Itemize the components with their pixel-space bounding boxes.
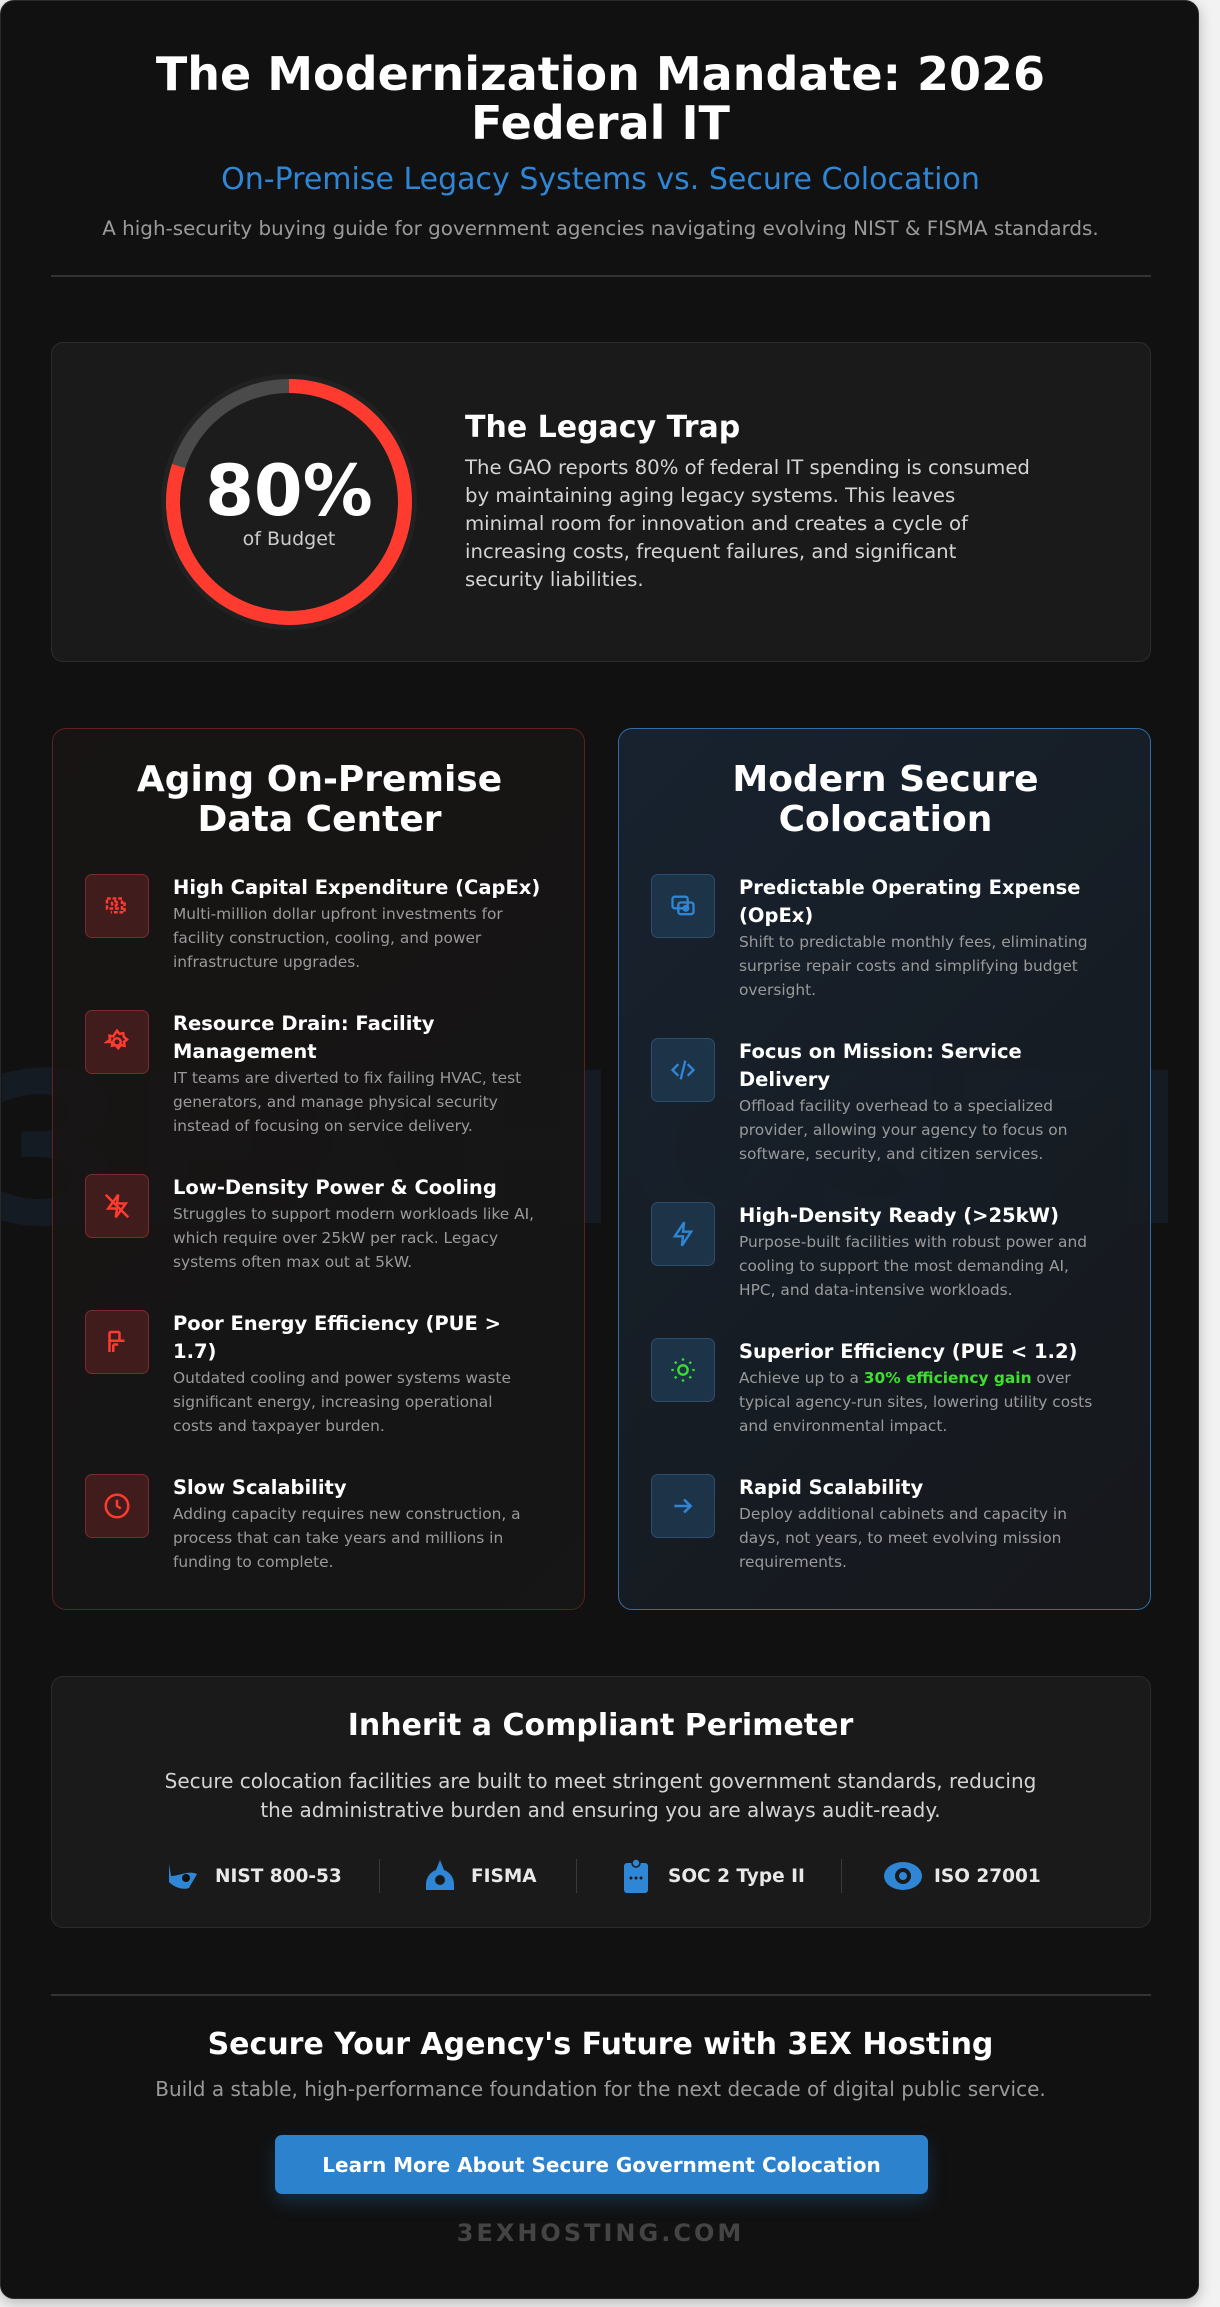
footer: brand: 3EXHOSTING.COM <box>457 2219 744 2247</box>
item: low density <box>85 1174 534 1271</box>
button: learn more: Learn More About Secure Government Colocation <box>322 2152 881 2176</box>
item: poor efficiency: Outdated cooling and power systems waste significant energy, increasing operational costs and taxpayer burden. <box>173 1369 511 1435</box>
badge: NIST <box>169 1864 342 1889</box>
badge: FISMA: FISMA <box>471 1866 537 1886</box>
item: opex <box>651 874 1088 999</box>
item: capex: High Capital Expenditure (CapEx) <box>173 876 540 899</box>
item: poor efficiency <box>85 1310 511 1435</box>
item: low density: Low-Density Power & Cooling <box>173 1176 497 1199</box>
badge: SOC 2 <box>624 1860 805 1893</box>
badge: ISO <box>884 1862 1041 1890</box>
panel: modern colocation <box>618 728 1151 1610</box>
item: focus on mission: Focus on Mission: Service Delivery <box>739 1040 1022 1091</box>
item: resource drain: IT teams are diverted to fix failing HVAC, test generators, and manage physical security instead of focusing on service delivery. <box>173 1069 521 1135</box>
badge: ISO: ISO 27001 <box>934 1866 1041 1886</box>
item: superior efficiency <box>651 1338 1092 1435</box>
item: slow scalability: Adding capacity requires new construction, a process that can take years and millions in funding to complete. <box>173 1505 521 1571</box>
heading: modern secure colocation: Modern Secure <box>732 759 1039 800</box>
donut chart: 80% of budget <box>166 379 412 625</box>
item: superior efficiency: Achieve up to a 30% efficiency gain over typical agency-run sites, lowering utility costs and environmental impact. <box>739 1369 1092 1435</box>
text: compliance body <box>165 1769 1036 1822</box>
heading: aging on-premise: Data Center <box>197 799 442 840</box>
heading: aging on-premise: Aging On-Premise <box>137 759 502 800</box>
item: low density: Struggles to support modern workloads like AI, which require over 25kW per rack. Legacy systems often max out at 5kW. <box>173 1205 534 1271</box>
item: capex <box>85 874 540 971</box>
item: superior efficiency: Superior Efficiency (PUE < 1.2) <box>739 1340 1077 1363</box>
item: slow scalability <box>85 1474 521 1571</box>
heading: CTA: Secure Your Agency's Future with 3EX Hosting <box>208 2027 993 2062</box>
heading: the legacy trap: The Legacy Trap <box>465 410 740 445</box>
badge: FISMA <box>426 1860 537 1890</box>
heading: aging on-premise <box>137 759 502 840</box>
text: legacy trap body: The GAO reports 80% of federal IT spending is consumed by maintaining aging legacy systems. This leaves minimal room for innovation and creates a cycle of increasing costs, frequent failures, and significant security liabilities. <box>465 456 1030 591</box>
text: CTA subtext: Build a stable, high-performance foundation for the next decade of digital public service. <box>155 2077 1046 2101</box>
tagline: A high-security buying guide for government agencies navigating evolving NIST & FISMA standards. <box>102 217 1099 240</box>
subtitle: On-Premise Legacy Systems vs. Secure Colocation <box>221 162 980 197</box>
text: compliance body: the administrative burden and ensuring you are always audit-ready. <box>260 1798 941 1822</box>
item: poor efficiency: Poor Energy Efficiency (PUE > 1.7) <box>173 1312 501 1363</box>
panel: compliance <box>51 1676 1151 1928</box>
badge: NIST: NIST 800-53 <box>215 1866 342 1886</box>
badge: SOC 2: SOC 2 Type II <box>668 1866 805 1886</box>
item: high density <box>651 1202 1087 1299</box>
heading: modern secure colocation: Colocation <box>779 799 992 840</box>
item: rapid scalability <box>651 1474 1067 1571</box>
item: opex: Shift to predictable monthly fees, eliminating surprise repair costs and simplifying budget oversight. <box>739 933 1088 999</box>
item: high density: High-Density Ready (>25kW) <box>739 1204 1059 1227</box>
button: learn more <box>275 2135 928 2194</box>
text: compliance body: Secure colocation facilities are built to meet stringent government standards, reducing <box>165 1769 1036 1793</box>
item: rapid scalability: Rapid Scalability <box>739 1476 923 1499</box>
item: resource drain: Resource Drain: Facility Management <box>173 1012 434 1063</box>
heading: modern secure colocation <box>732 759 1039 840</box>
item: focus on mission <box>651 1038 1067 1163</box>
title <box>156 47 1045 150</box>
heading: inherit a compliant perimeter: Inherit a Compliant Perimeter <box>348 1708 853 1743</box>
item: focus on mission: Offload facility overhead to a specialized provider, allowing your agency to focus on software, security, and citizen services. <box>739 1097 1067 1163</box>
item: capex: Multi-million dollar upfront investments for facility construction, cooling, and power infrastructure upgrades. <box>173 905 503 971</box>
item: opex: Predictable Operating Expense (OpEx) <box>739 876 1080 927</box>
panel: aging on-premise <box>52 728 585 1610</box>
item: resource drain <box>85 1010 521 1135</box>
donut chart: 80% of budget: 80% <box>205 450 373 532</box>
item: high density: Purpose-built facilities with robust power and cooling to support the most demanding AI, HPC, and data-intensive workloads. <box>739 1233 1087 1299</box>
item: rapid scalability: Deploy additional cabinets and capacity in days, not years, to meet evolving mission requirements. <box>739 1505 1067 1571</box>
item: slow scalability: Slow Scalability <box>173 1476 347 1499</box>
donut chart: 80% of budget: of Budget <box>243 528 335 550</box>
panel: legacy trap <box>51 342 1151 662</box>
title: Federal IT <box>471 96 730 150</box>
title: The Modernization Mandate: 2026 <box>156 47 1045 101</box>
